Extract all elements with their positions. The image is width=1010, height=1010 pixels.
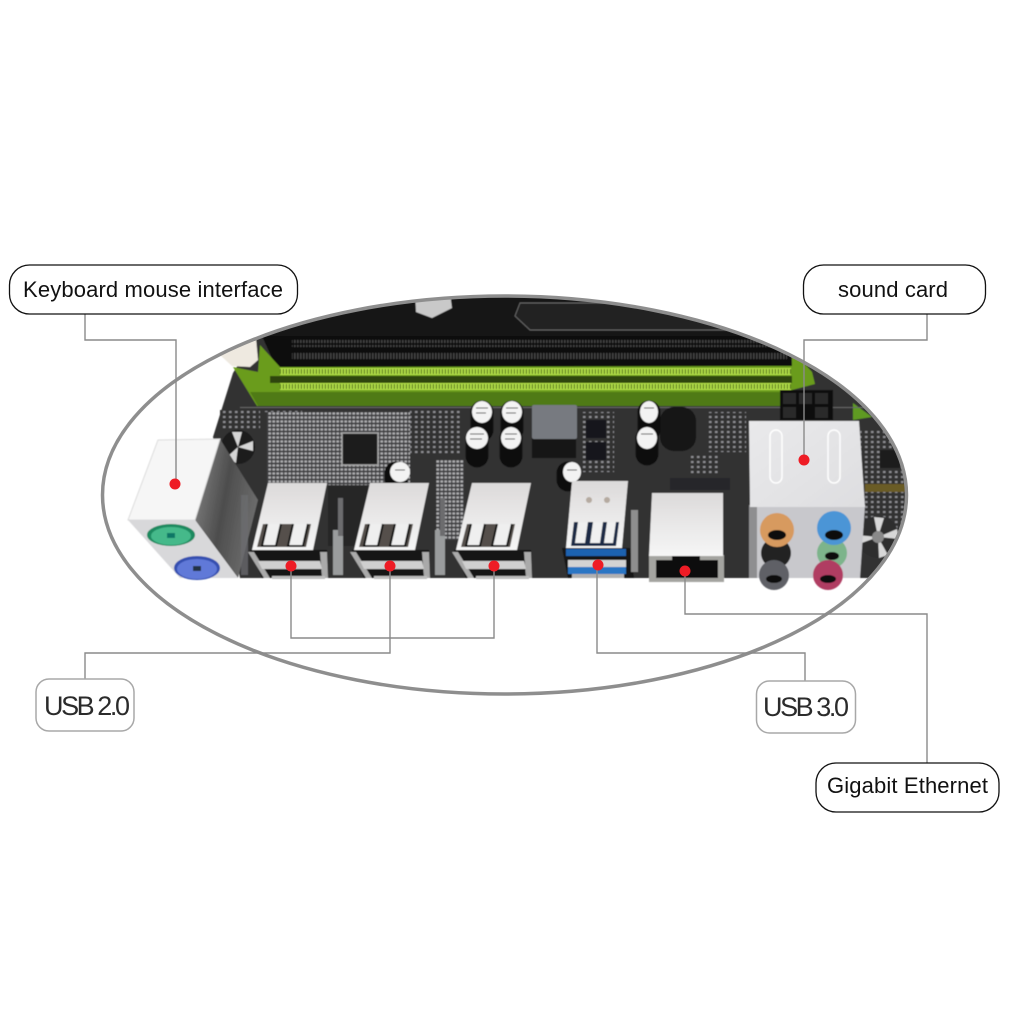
USB stack 1 (248, 483, 343, 579)
motherboard photo inside ellipse (128, 290, 910, 590)
PCB components (240, 407, 910, 408)
leader lines: USB 2.0 (85, 566, 494, 679)
label: keyboard mouse interface: Keyboard mouse interface (23, 277, 283, 302)
label: USB 2.0: USB 2.0 (44, 691, 130, 721)
label: USB 2.0 (36, 679, 134, 731)
USB stack 3 (452, 483, 532, 579)
audio jacks overflow below board (759, 560, 843, 590)
IC chip (342, 433, 378, 465)
circuit board (212, 338, 898, 579)
label: gigabit ethernet: Gigabit Ethernet (827, 773, 988, 798)
keyboard mouse PS/2 port (128, 439, 258, 580)
white connector at left edge (220, 338, 258, 367)
leader line: USB 3.0 (597, 566, 805, 681)
label: USB 3.0: USB 3.0 (763, 692, 849, 722)
USB 3.0 port (562, 481, 638, 578)
label: gigabit ethernet (816, 763, 999, 812)
heatsink fans (221, 430, 899, 558)
label: sound card (804, 265, 986, 314)
USB stack 2 (350, 483, 445, 579)
gigabit ethernet port (649, 493, 724, 582)
leader line: sound card (804, 314, 927, 460)
upper board with CPU socket edge (264, 298, 742, 338)
inductors (532, 438, 576, 458)
label: sound card: sound card (838, 277, 948, 302)
capacitors (390, 401, 658, 482)
sound card audio jacks body (749, 421, 865, 578)
ellipse outline (102, 296, 906, 694)
leader line: gigabit ethernet (685, 571, 927, 763)
USB 2.0 ports (241, 483, 532, 579)
memory slots (262, 336, 792, 367)
power connector (780, 390, 833, 420)
label: USB 3.0 (756, 681, 856, 733)
leader line: keyboard mouse (85, 314, 176, 484)
label: keyboard mouse interface (10, 265, 298, 314)
red marker dots (170, 454, 810, 576)
